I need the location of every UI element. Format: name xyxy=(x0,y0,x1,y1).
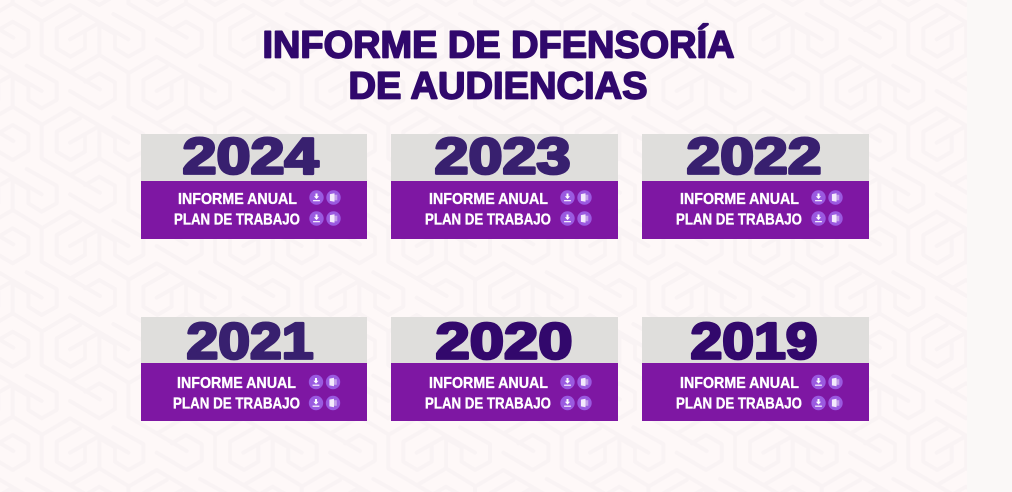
links: informe anual: INFORME ANUAL xyxy=(680,191,799,208)
links: plan de trabajo: PLAN DE TRABAJO xyxy=(676,212,802,228)
year 2019: 2019 xyxy=(690,312,818,370)
year 2022: 2022 xyxy=(686,128,822,184)
panel: 2019 xyxy=(642,312,869,421)
links: plan de trabajo: PLAN DE TRABAJO xyxy=(425,212,551,228)
links: informe anual: INFORME ANUAL xyxy=(680,375,799,392)
panel: 2020 xyxy=(391,312,618,421)
links: informe anual: INFORME ANUAL xyxy=(429,375,548,392)
panel: 2024 xyxy=(141,128,367,239)
links: informe anual: INFORME ANUAL xyxy=(429,191,548,208)
links: plan de trabajo: PLAN DE TRABAJO xyxy=(425,396,551,412)
year 2024: 2024 xyxy=(182,128,319,184)
links: informe anual: INFORME ANUAL xyxy=(178,191,297,208)
links: plan de trabajo: PLAN DE TRABAJO xyxy=(174,212,300,228)
links: informe anual: INFORME ANUAL xyxy=(177,375,296,392)
title: INFORME DE DFENSORÍA xyxy=(262,22,734,66)
links: plan de trabajo: PLAN DE TRABAJO xyxy=(676,396,802,412)
year 2021: 2021 xyxy=(186,312,314,370)
year 2023: 2023 xyxy=(434,128,570,184)
title: DE AUDIENCIAS xyxy=(348,66,648,108)
panel: 2022 xyxy=(642,128,869,239)
panel: 2023 xyxy=(391,128,618,239)
title xyxy=(262,22,734,108)
year 2020: 2020 xyxy=(436,312,572,370)
links: plan de trabajo: PLAN DE TRABAJO xyxy=(173,396,300,412)
panel: 2021 xyxy=(141,312,367,421)
